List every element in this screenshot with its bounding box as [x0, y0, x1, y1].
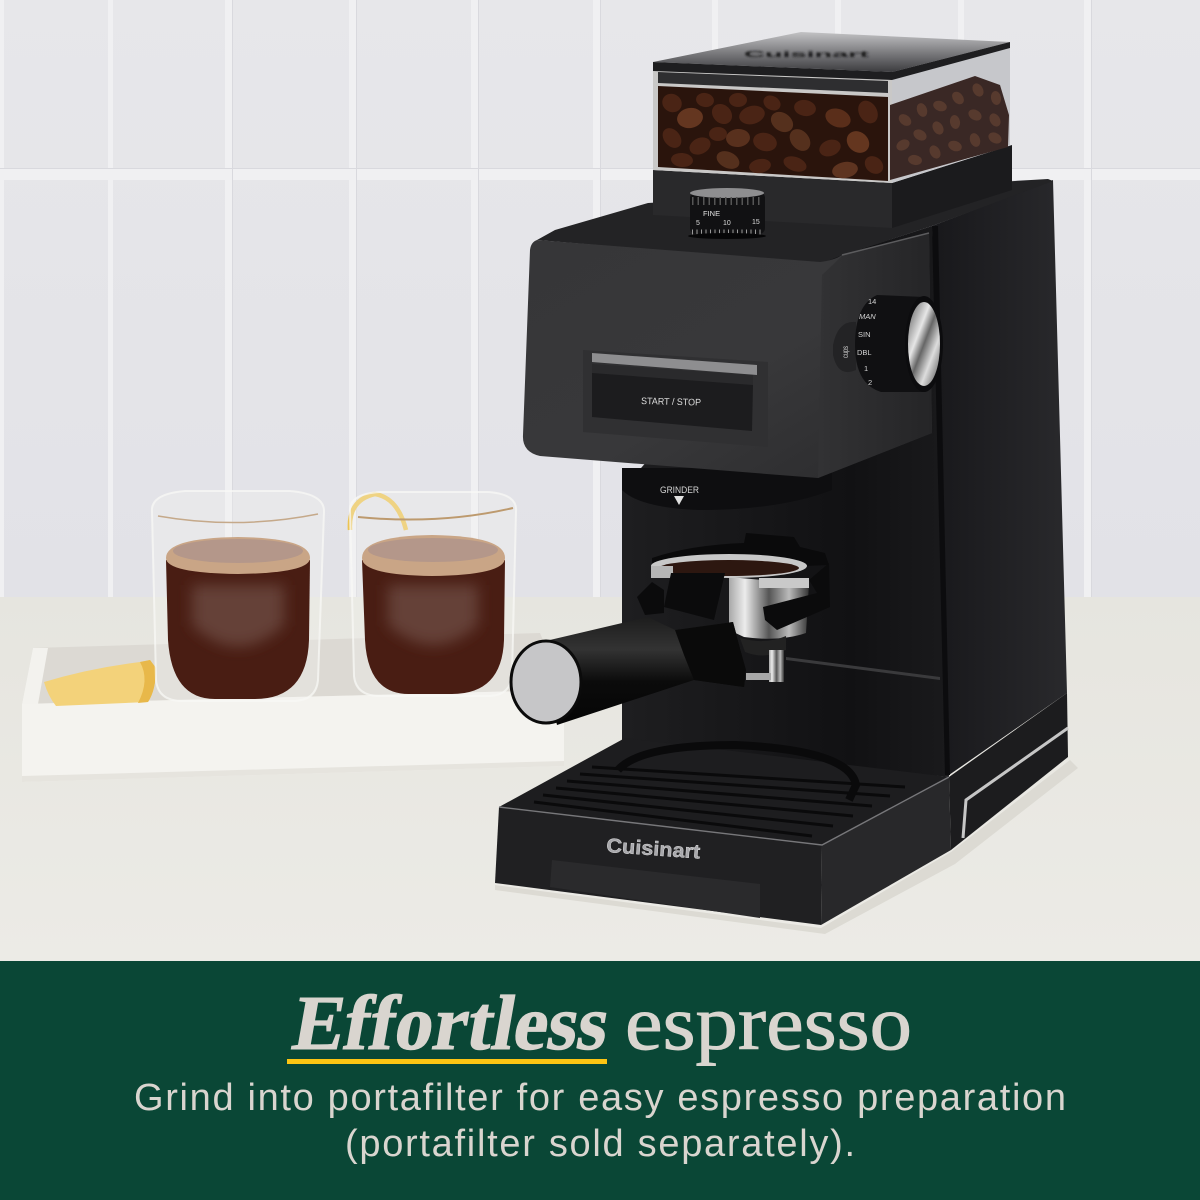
hopper lid [653, 32, 1010, 72]
tower base with silver strip [949, 693, 1068, 850]
coffee grinder [495, 32, 1078, 934]
glass of coffee, right [350, 492, 516, 696]
grind size knob [688, 188, 766, 239]
subtitle: Grind into portafilter for easy espresso preparation [134, 1077, 1066, 1119]
start stop panel [583, 350, 768, 447]
white serving tray [22, 633, 564, 782]
side dial: DBL [857, 348, 872, 357]
green caption band [0, 961, 1200, 1200]
bean hopper [653, 32, 1010, 183]
hopper base [653, 145, 1012, 228]
grinder neck [622, 468, 832, 510]
coffee grounds rim [651, 554, 807, 578]
grind size knob: 10 [723, 220, 731, 227]
grind size knob: 15 [752, 219, 760, 226]
grinder tower [932, 180, 1067, 775]
heading underline [287, 1059, 607, 1064]
portafilter [511, 533, 830, 725]
subtitle: (portafilter sold separately). [345, 1123, 855, 1165]
beans front side [658, 86, 888, 181]
cup ring [618, 745, 856, 800]
portafilter handle [537, 617, 746, 725]
countertop [0, 597, 1200, 961]
side dial: 1 [864, 364, 868, 373]
tray logo: Cuisinart [606, 835, 701, 864]
lemon twist [350, 494, 406, 530]
drip tray [495, 738, 951, 925]
machine head [523, 179, 1053, 478]
start stop panel: START / STOP [641, 396, 701, 409]
side dial: 14 [868, 297, 876, 306]
lemon wedge [44, 660, 156, 706]
beans right side [890, 76, 1009, 180]
contact shadow [495, 760, 1078, 934]
side dial [833, 295, 943, 392]
handle end cap [511, 641, 581, 723]
rear rim of portafilter bracket [652, 533, 829, 572]
lower back panel [622, 226, 949, 777]
grind size knob: 5 [696, 220, 700, 227]
bean hopper: Cuisinart [744, 50, 870, 59]
heading: Effortless [287, 981, 616, 1067]
heading: espresso [625, 979, 912, 1066]
grind size knob: FINE [703, 209, 720, 218]
portafilter basket [729, 577, 809, 639]
glass of coffee, left [152, 491, 324, 701]
tiled wall background [0, 0, 1200, 600]
heading [287, 979, 912, 1067]
side dial: cups [841, 346, 850, 358]
grinder neck: GRINDER [660, 485, 699, 496]
drip tray ridges [534, 767, 905, 836]
bracket arms [664, 573, 725, 620]
side dial: 2 [868, 378, 872, 387]
subtitle [134, 1077, 1066, 1165]
side dial: MAN [859, 312, 876, 321]
side dial: SIN [858, 330, 871, 339]
